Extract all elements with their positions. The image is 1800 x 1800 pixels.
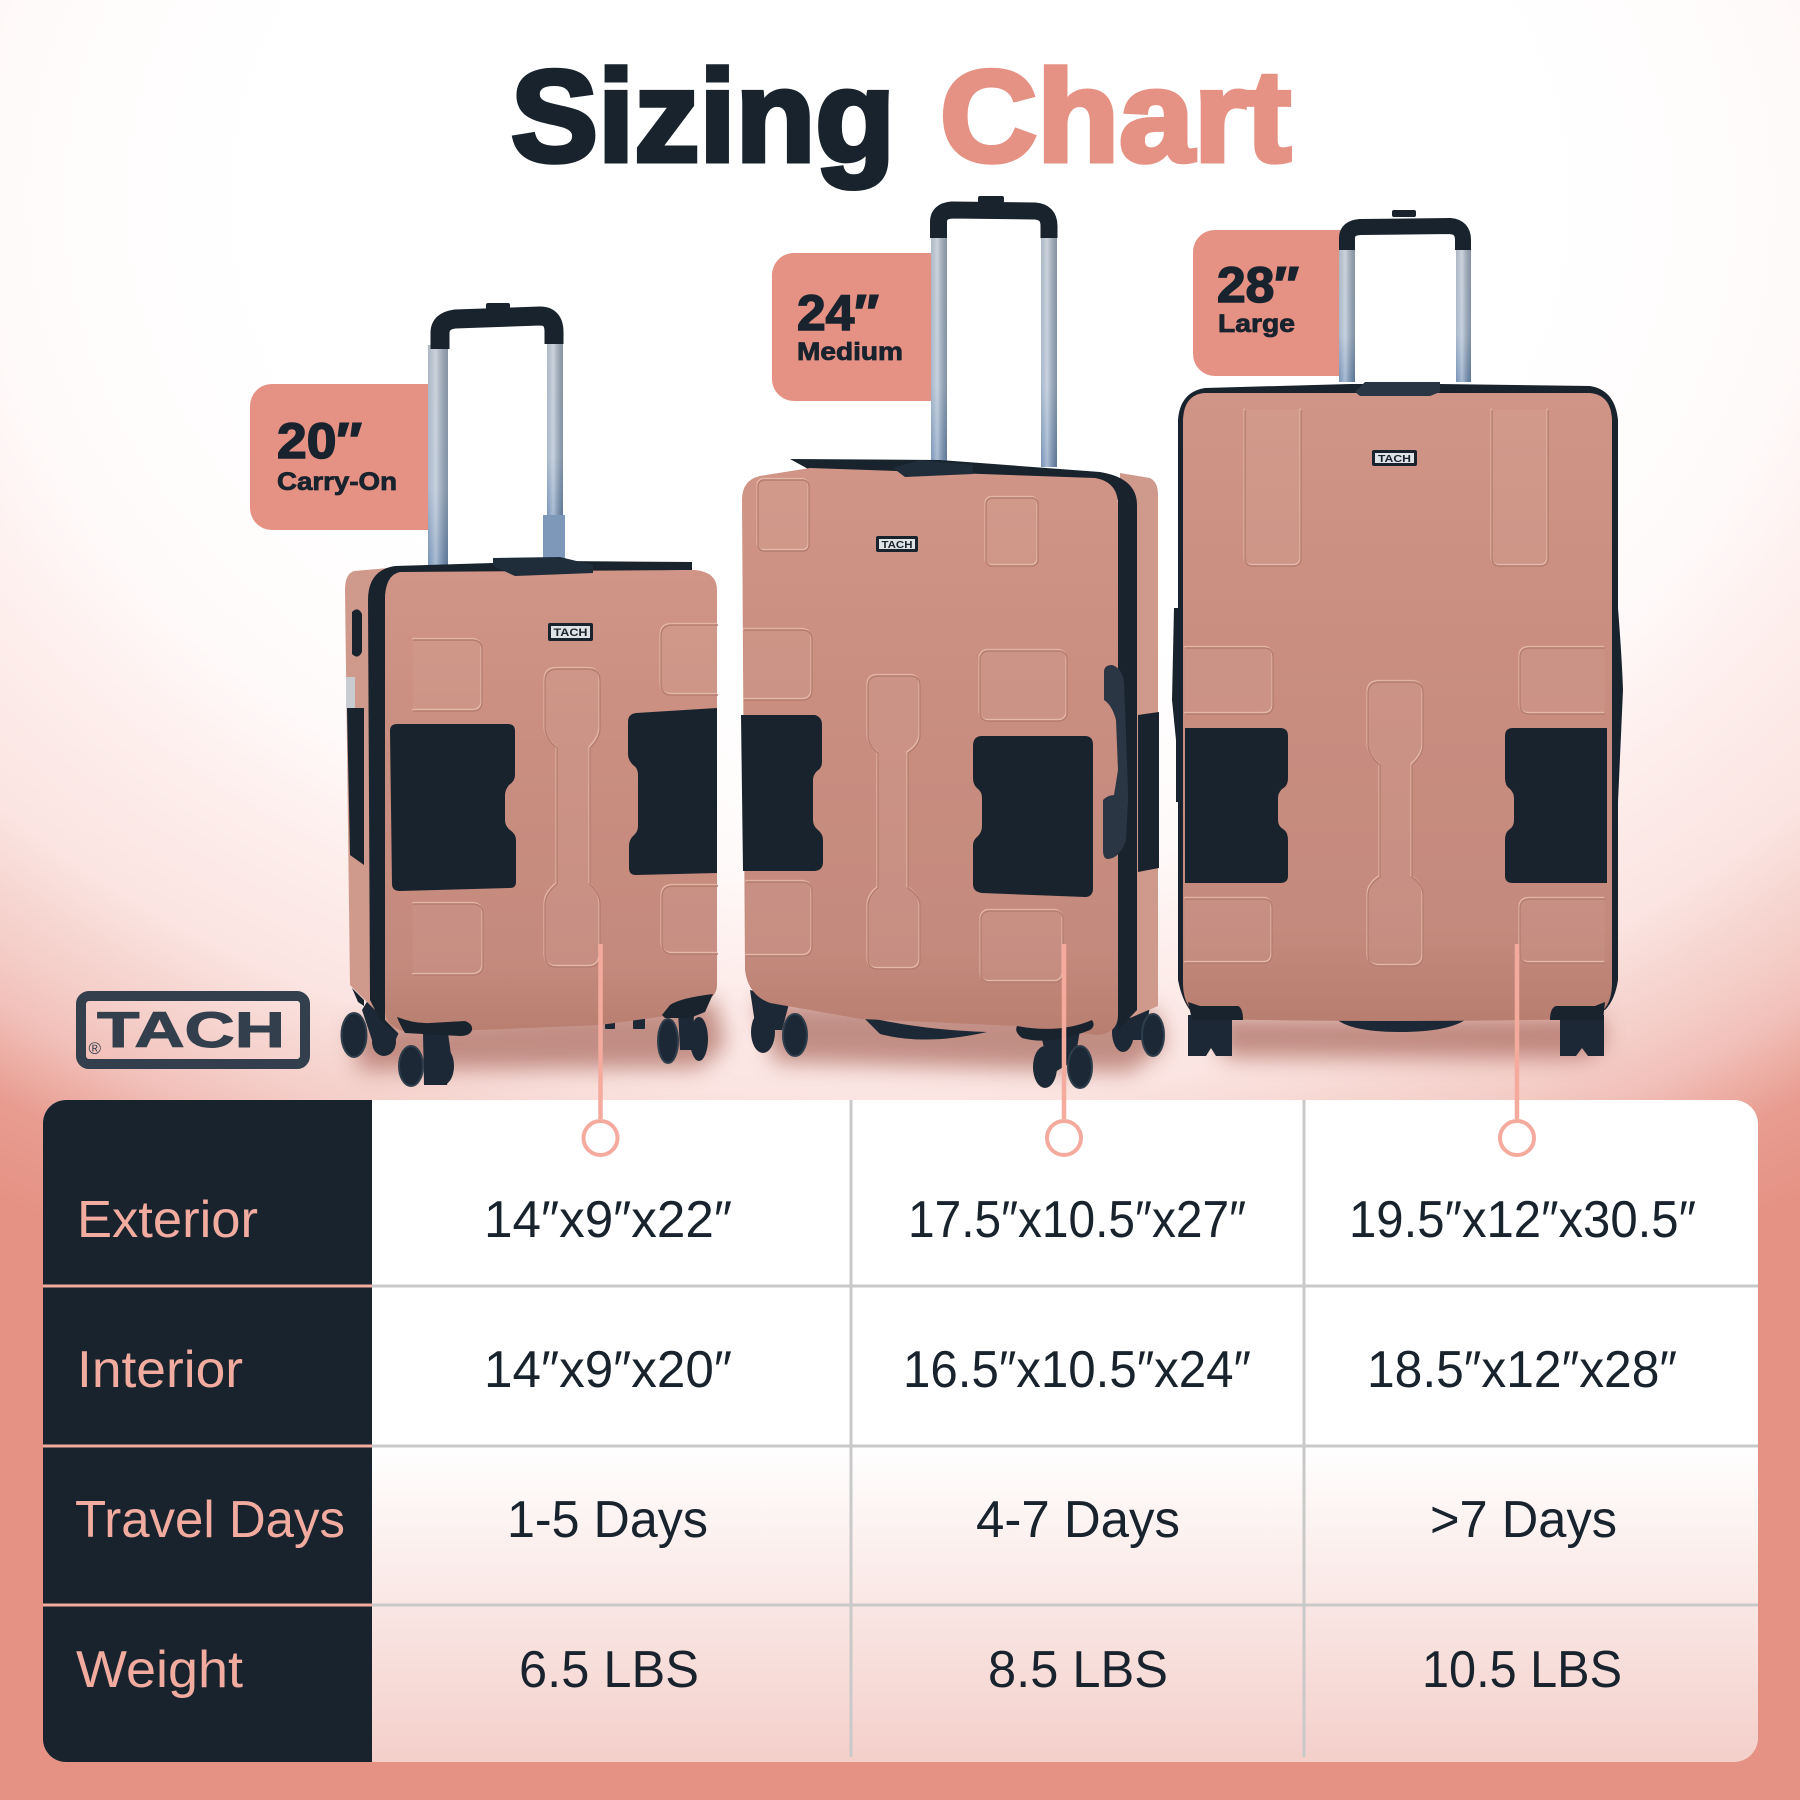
brand plate	[548, 623, 593, 641]
foot brackets	[397, 994, 713, 1036]
size tag: 20 inch carry-on	[250, 384, 432, 530]
exterior values: 14″x9″x22″	[484, 1191, 732, 1249]
leader line and marker: 24 inch	[1047, 944, 1081, 1155]
TACH logo: ®	[88, 1039, 102, 1058]
size tag: 28 inch large: 28″	[1217, 257, 1299, 313]
size tag: 20 inch carry-on: 20″	[277, 413, 362, 469]
exterior values: 19.5″x12″x30.5″	[1349, 1191, 1696, 1249]
travel days values: >7 Days	[1430, 1491, 1617, 1549]
row labels: Exterior	[77, 1191, 258, 1249]
brand plate: TACH	[1378, 454, 1411, 465]
weight values: 8.5 LBS	[988, 1641, 1168, 1699]
zipper outline	[1178, 384, 1618, 1010]
suitcase: 24 inch medium	[741, 196, 1164, 1088]
leader line and marker: 20 inch	[584, 944, 618, 1155]
size tag: 28 inch large: Large	[1218, 310, 1295, 338]
brand plate: TACH	[882, 540, 912, 551]
dark grip panels	[741, 715, 1093, 897]
side pocket and carry handle	[346, 609, 364, 1006]
telescoping handle	[931, 196, 1057, 467]
interior values: 16.5″x10.5″x24″	[903, 1341, 1251, 1399]
zipper pull	[493, 557, 593, 576]
exterior values	[484, 1191, 1696, 1249]
foot brackets	[1016, 1020, 1094, 1041]
telescoping handle	[428, 303, 565, 567]
table background	[43, 1100, 1758, 1762]
row label column	[43, 1100, 372, 1762]
front shell	[385, 570, 717, 1033]
leader line and marker: 28 inch	[1500, 944, 1534, 1155]
zipper pull	[893, 460, 973, 477]
weight values	[519, 1641, 1622, 1699]
interior values: 14″x9″x20″	[484, 1341, 732, 1399]
size tag: 24 inch medium: 24″	[797, 285, 879, 341]
title	[511, 43, 1291, 189]
zipper pull	[1355, 382, 1440, 396]
travel days values: 1-5 Days	[507, 1491, 708, 1549]
raised molded details	[1185, 410, 1605, 966]
size tag: 20 inch carry-on: Carry-On	[277, 468, 397, 496]
interior values: 18.5″x12″x28″	[1367, 1341, 1677, 1399]
row labels	[75, 1191, 345, 1699]
wheels	[1188, 1015, 1604, 1056]
foot brackets	[1188, 1002, 1605, 1020]
travel days values	[507, 1491, 1617, 1549]
row labels: Weight	[76, 1641, 244, 1699]
zipper	[790, 459, 1137, 1030]
side dark panel	[1138, 712, 1159, 872]
wheels	[342, 1000, 708, 1086]
suitcase: 28 inch large	[1172, 210, 1623, 1056]
weight values: 6.5 LBS	[519, 1641, 699, 1699]
front shell	[742, 468, 1118, 1035]
weight values: 10.5 LBS	[1422, 1641, 1622, 1699]
side carry handle	[1103, 665, 1128, 859]
zipper	[368, 561, 692, 1034]
title: Chart	[940, 43, 1291, 189]
TACH logo: TACH	[97, 1002, 285, 1058]
row labels: Travel Days	[75, 1491, 345, 1549]
interior values	[484, 1341, 1677, 1399]
travel days values: 4-7 Days	[976, 1491, 1180, 1549]
title: Sizing	[511, 43, 895, 189]
row labels: Interior	[77, 1341, 243, 1399]
TACH logo	[81, 996, 305, 1064]
suitcase shadows	[350, 1000, 1605, 1072]
exterior values: 17.5″x10.5″x27″	[908, 1191, 1246, 1249]
front shell	[1183, 393, 1612, 1021]
side shell	[1120, 473, 1158, 1018]
size tag: 28 inch large	[1193, 230, 1343, 376]
dark grip panels	[1185, 728, 1607, 883]
raised molded details	[744, 480, 1067, 982]
side straps	[1172, 608, 1623, 802]
size tag: 24 inch medium: Medium	[797, 338, 903, 366]
table: sizing specifications	[43, 1100, 1758, 1762]
suitcase: 20 inch carry-on	[342, 303, 718, 1086]
brand plate: TACH	[554, 627, 588, 639]
brand plate	[1372, 450, 1417, 466]
wheels	[750, 990, 1164, 1088]
size tag: 24 inch medium	[772, 253, 935, 401]
dark grip panels	[390, 708, 717, 891]
brand plate	[876, 536, 918, 552]
raised molded details	[413, 625, 718, 975]
telescoping handle	[1339, 210, 1471, 382]
side shell	[345, 567, 400, 1035]
